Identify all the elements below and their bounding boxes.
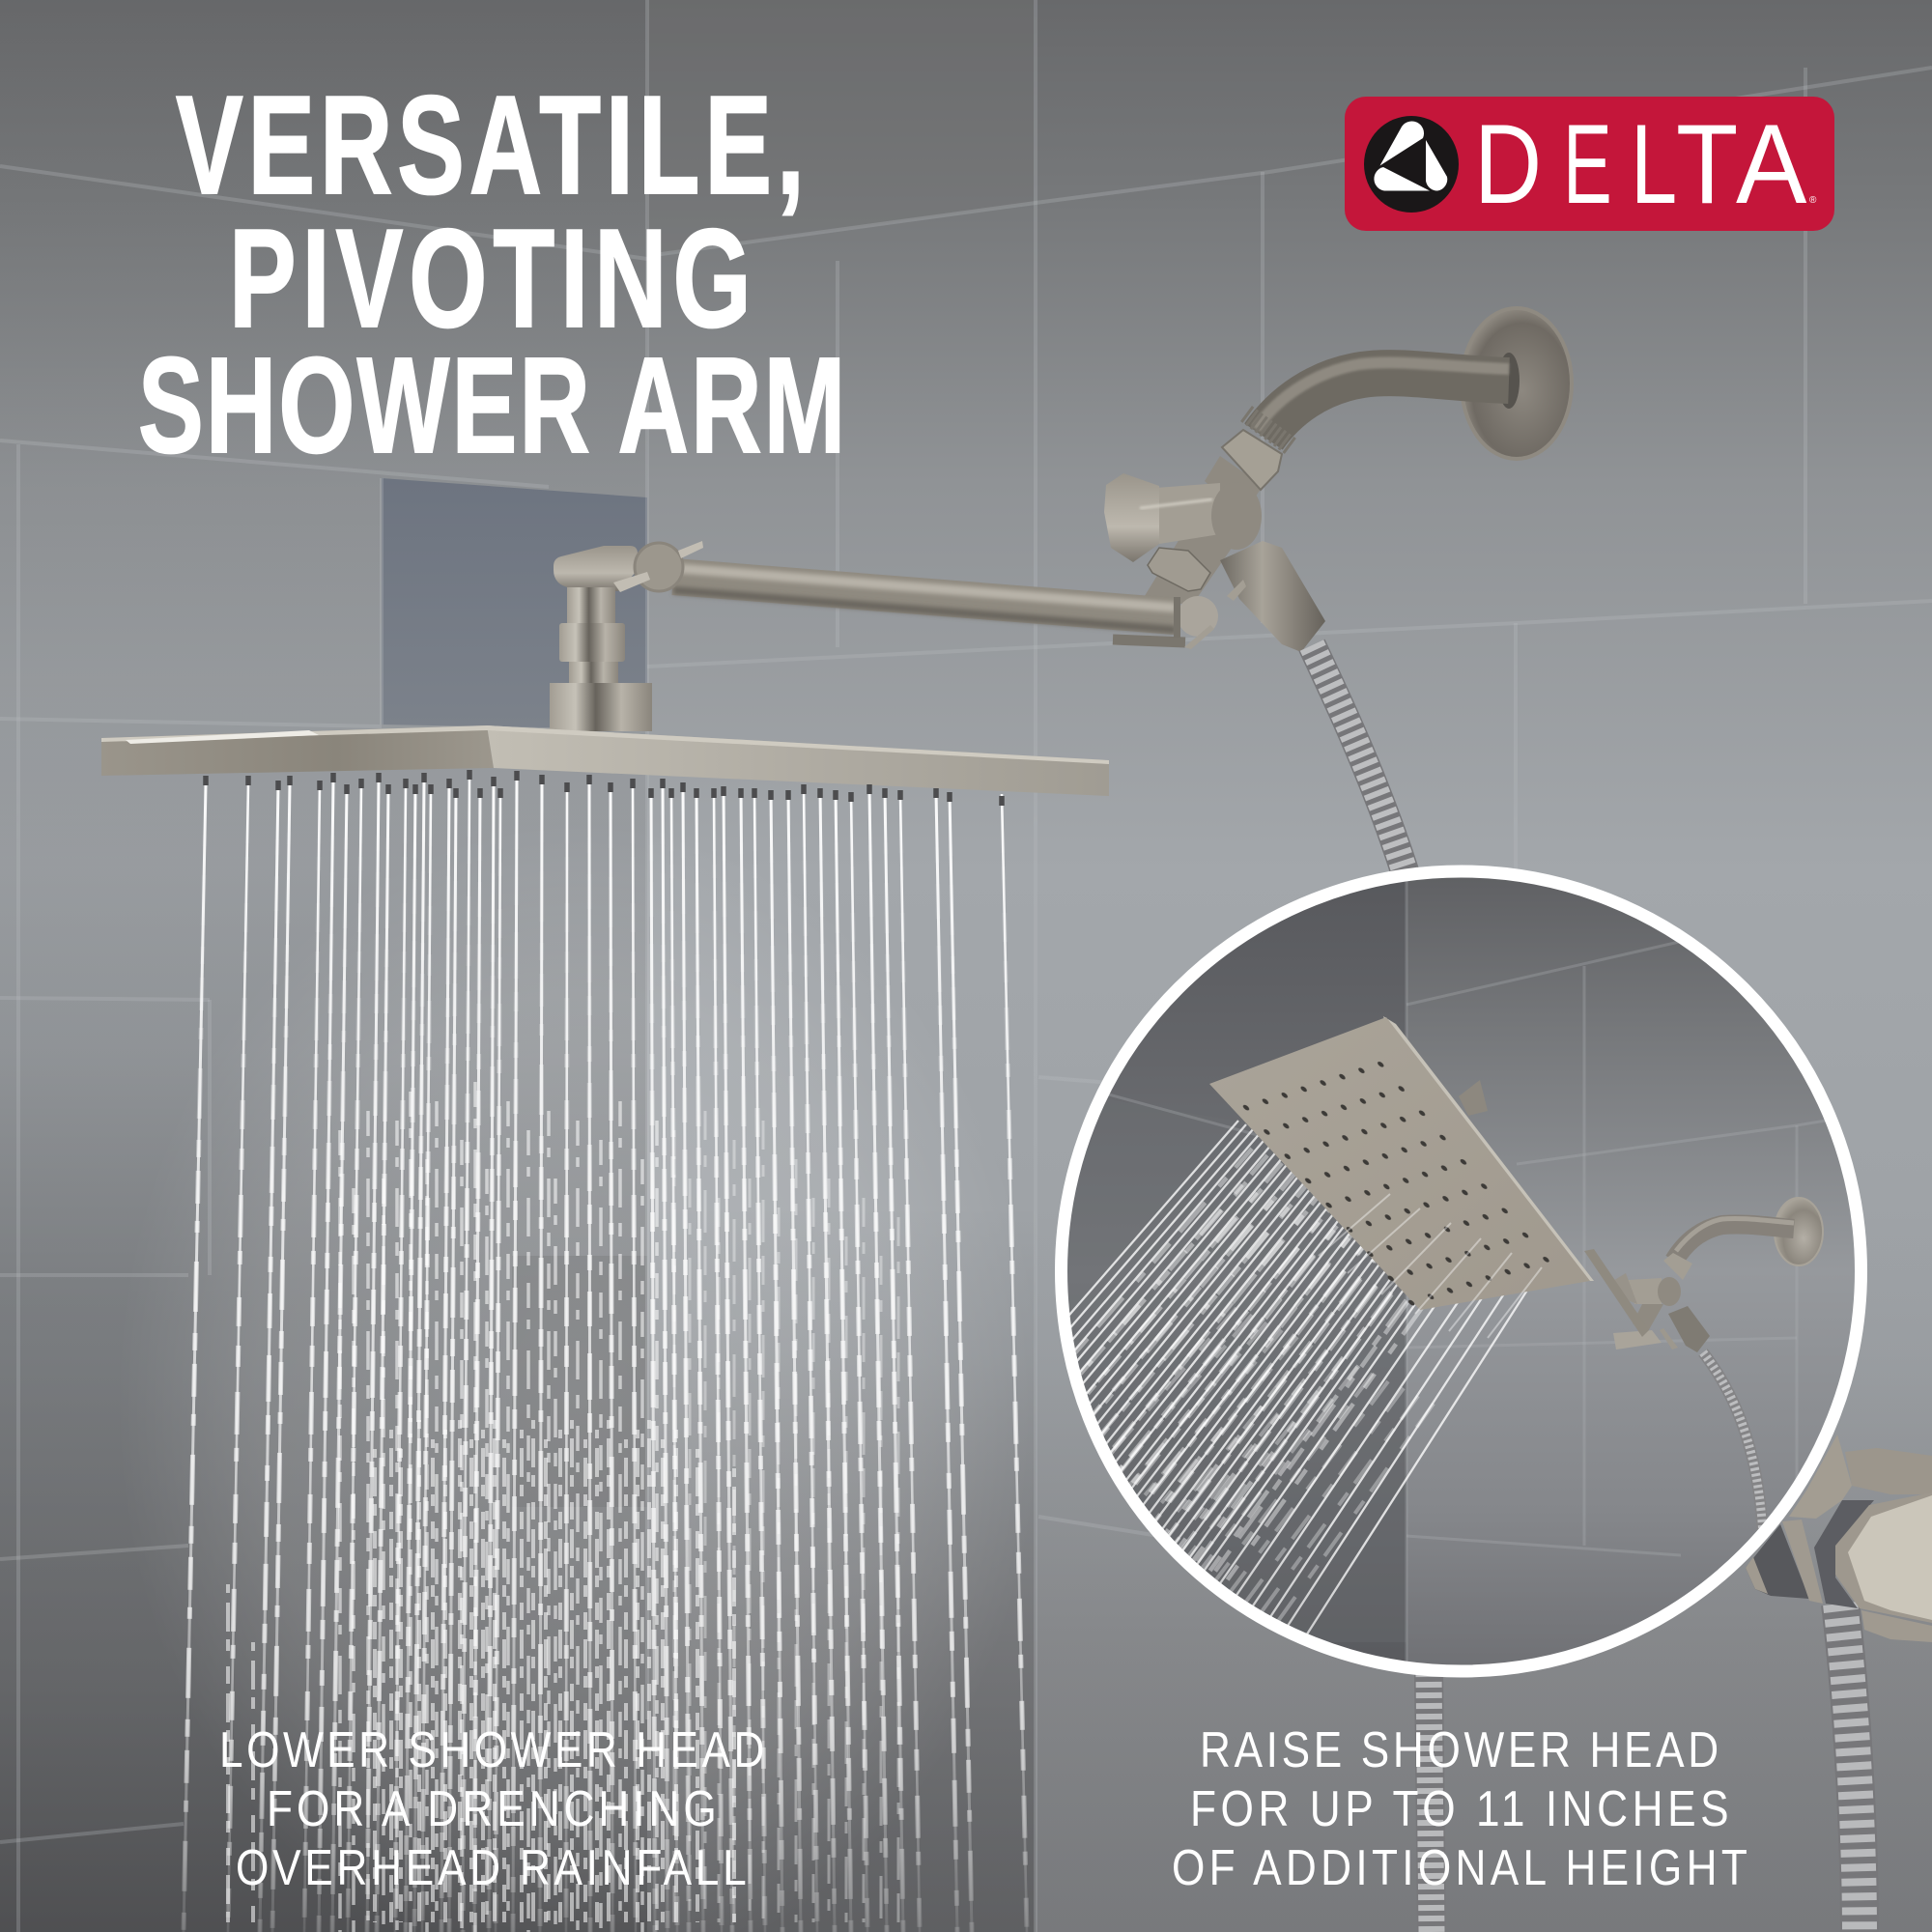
caption: lower shower head: [219, 1722, 764, 1896]
title: PIVOTING: [229, 200, 752, 356]
logo wordmark: L: [1631, 100, 1677, 227]
rain shower head: [101, 725, 1109, 796]
diverter cup and body: [1156, 483, 1220, 544]
logo wordmark: D: [1474, 100, 1542, 227]
logo wordmark: T: [1676, 100, 1738, 227]
logo wordmark: A: [1736, 101, 1807, 228]
caption: lower shower head: OVERHEAD RAINFALL: [236, 1840, 747, 1896]
inset circle: raised shower head: [1055, 866, 1867, 1677]
caption: raise shower head: RAISE SHOWER HEAD: [1200, 1722, 1719, 1778]
caption: lower shower head: LOWER SHOWER HEAD: [219, 1722, 764, 1778]
inset wall tiles: [1067, 881, 1826, 1662]
ball joint stack: [550, 587, 652, 731]
metal hose lower center: [1429, 1671, 1432, 1932]
spray nozzles: [206, 770, 1002, 806]
caption: raise shower head: OF ADDITIONAL HEIGHT: [1172, 1840, 1747, 1896]
metal hose lower right: [1840, 1604, 1860, 1932]
arm knuckle: [554, 541, 703, 592]
swing arm: [673, 568, 1185, 642]
caption: raise shower head: [1172, 1722, 1747, 1896]
elbow wing nut: [1174, 580, 1246, 649]
registered mark: ®: [1809, 195, 1817, 206]
white ring: [1061, 871, 1861, 1671]
hose connector: [1220, 541, 1325, 652]
caption: lower shower head: FOR A DRENCHING: [267, 1781, 717, 1837]
diverter disk: [1211, 482, 1262, 550]
logo wordmark: [1474, 100, 1807, 228]
title: SHOWER ARM: [138, 330, 845, 482]
tube under hex nut: [1205, 456, 1263, 502]
logo wordmark: E: [1563, 100, 1612, 227]
rainfall water streams: [116, 778, 1043, 1932]
wall flange: [1462, 308, 1572, 459]
lower stem and hex: [1140, 517, 1236, 604]
shower arm and fittings: [550, 308, 1572, 731]
title: VERSATILE,: [176, 67, 805, 223]
title: [138, 67, 845, 482]
caption: raise shower head: FOR UP TO 11 INCHES: [1190, 1781, 1729, 1837]
curved shower arm: [1246, 353, 1520, 446]
hex nut: [1222, 430, 1282, 490]
metal hose upper: [1312, 645, 1406, 874]
hose holder bracket: [1746, 1435, 1932, 1642]
inset water spray: [1069, 1120, 1528, 1634]
Delta logo: [1345, 97, 1834, 231]
inset head plate: [1209, 1016, 1594, 1338]
logo mark: [1364, 116, 1459, 213]
inset arm assembly: [1584, 1198, 1823, 1536]
